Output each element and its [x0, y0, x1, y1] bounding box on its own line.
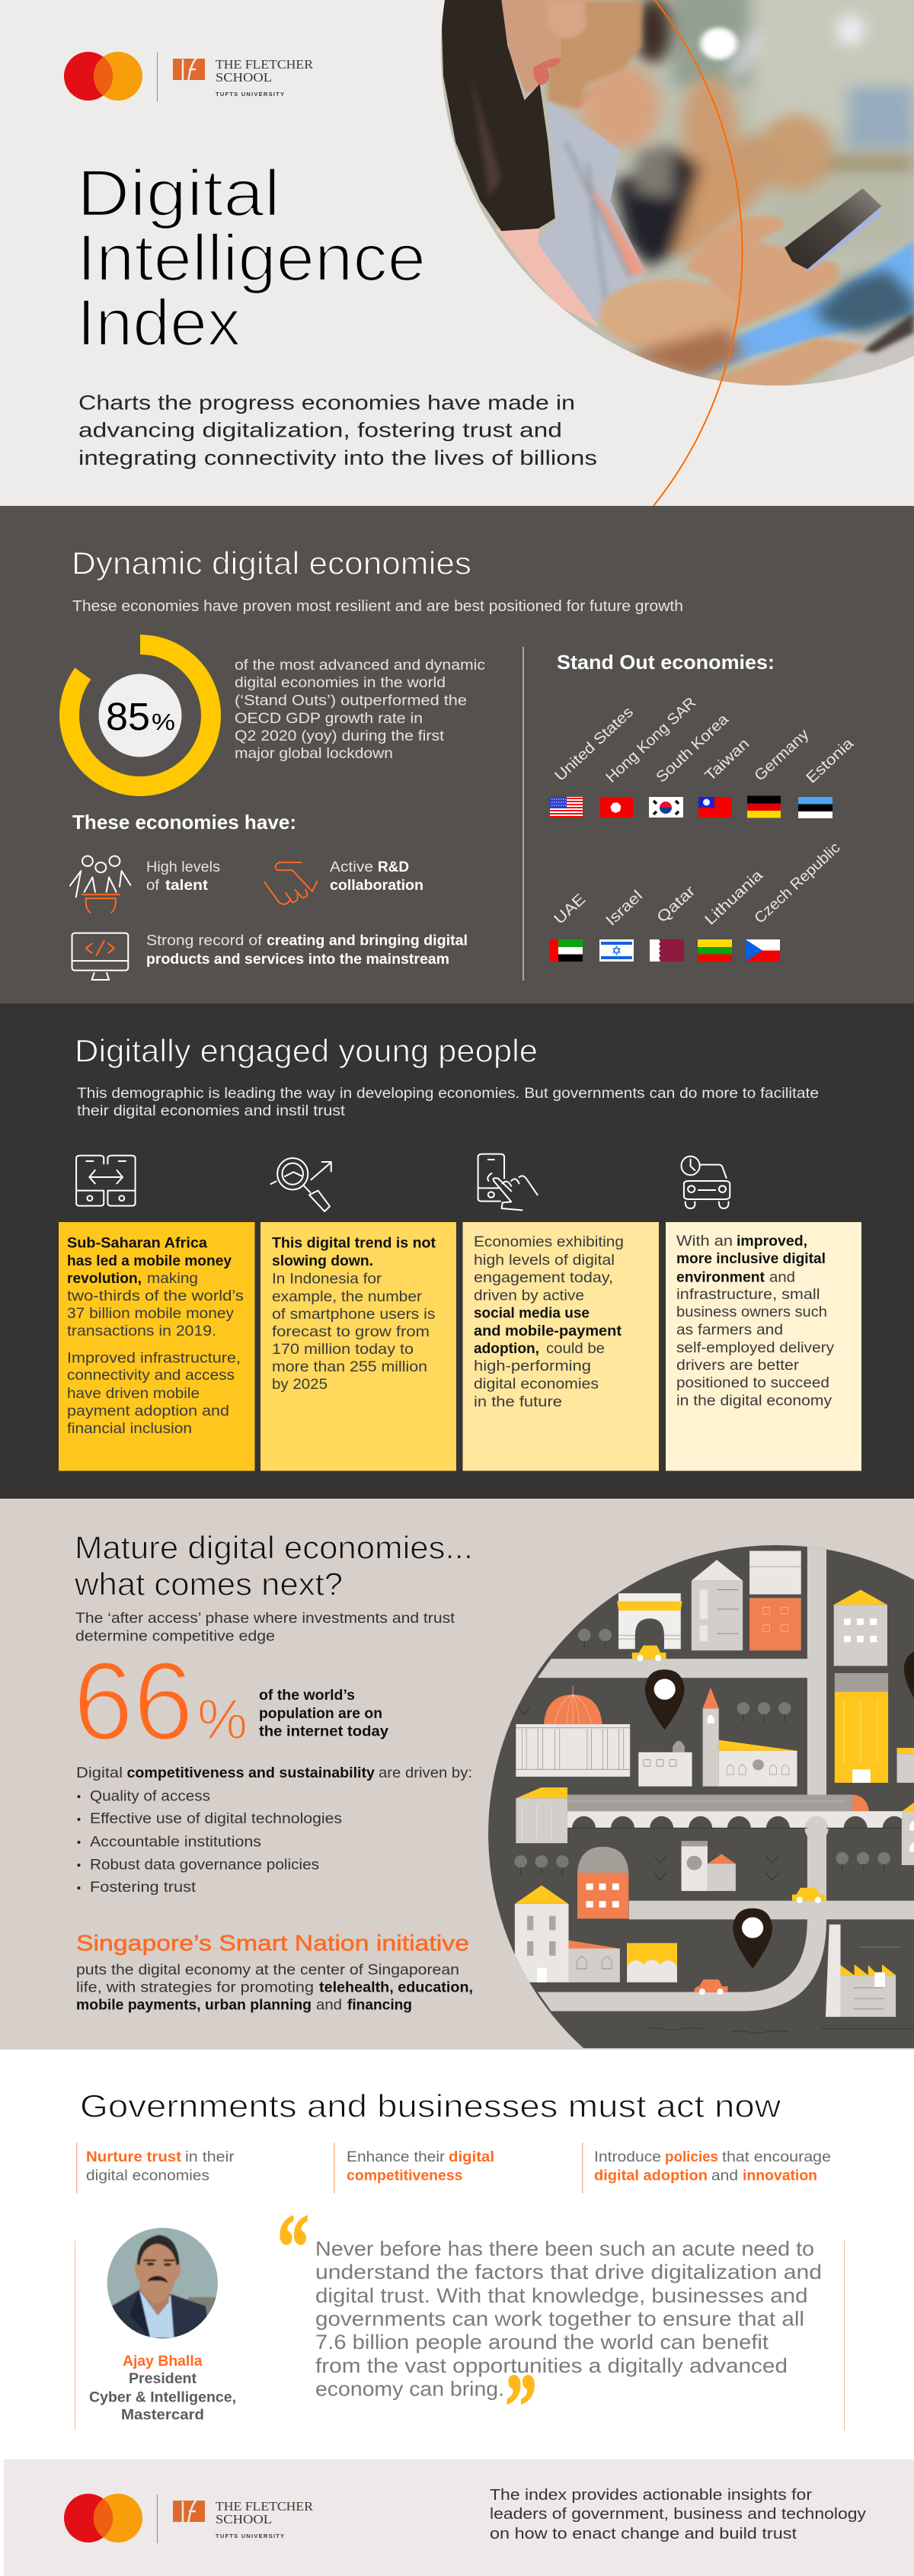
- factory: [826, 1925, 841, 2017]
- speaker name and title: President: [129, 2370, 197, 2387]
- bullet list: [78, 1787, 342, 1896]
- country labels row 1: Germany: [751, 726, 813, 785]
- card: Sub-Saharan Africa: Improved infrastructure,: [67, 1350, 241, 1367]
- heading: Governments and businesses must act now: [80, 2088, 781, 2124]
- action: digital competitiveness: [334, 2142, 494, 2194]
- card: digital trend: example, the number: [272, 1288, 423, 1305]
- card: Sub-Saharan Africa: payment adoption and: [67, 1403, 229, 1419]
- flag: Lithuania: [698, 939, 732, 962]
- country labels row 1: [551, 694, 858, 787]
- footer text: [490, 2487, 866, 2542]
- heading: what comes next?: [74, 1566, 343, 1602]
- card: digital engagement: in the future: [474, 1394, 562, 1410]
- photo: people using smartphones: [434, 0, 914, 394]
- action: policies: Introduce: [594, 2149, 661, 2165]
- card: Sub-Saharan Africa: Sub-Saharan Africa: [67, 1234, 207, 1251]
- stat description: Q2 2020 (yoy) during the first: [235, 728, 445, 744]
- card: inclusive environment: positioned to succeed: [676, 1374, 829, 1391]
- action: policies: policies: [665, 2149, 718, 2165]
- bullet list: Accountable institutions: [90, 1833, 261, 1850]
- text: digital products: products and services into the mainstream: [146, 951, 449, 968]
- card: digital engagement: engagement today,: [474, 1269, 613, 1286]
- card: digital engagement: Economies exhibiting: [474, 1234, 624, 1250]
- action: digital competitiveness: digital: [449, 2149, 494, 2165]
- action: policies: [582, 2142, 831, 2194]
- country labels row 2: Lithuania: [701, 866, 767, 929]
- text: digital products: [146, 933, 468, 968]
- card: Sub-Saharan Africa: making: [147, 1270, 198, 1287]
- card: Sub-Saharan Africa: has led a mobile money: [67, 1253, 232, 1269]
- card: inclusive environment: business owners such: [676, 1304, 827, 1320]
- title: [77, 157, 426, 360]
- country labels row 2: Israel: [602, 888, 646, 930]
- logo: Mastercard and The Fletcher School: SCHOOL: [216, 70, 272, 85]
- heading: Mature digital economies...: [75, 1530, 473, 1565]
- card: Sub-Saharan Africa: 37 billion mobile money: [67, 1305, 234, 1322]
- flag: United States: [550, 797, 583, 818]
- footer text: on how to enact change and build trust: [490, 2526, 797, 2542]
- quote text: governments can work together to ensure that all: [315, 2308, 804, 2331]
- text: drivers of competitiveness: [76, 1765, 472, 1781]
- stat description: (‘Stand Outs’) outperformed the: [235, 693, 467, 709]
- card: digital trend: of smartphone users is: [272, 1306, 436, 1323]
- action: nurture trust: digital economies: [86, 2168, 209, 2184]
- speaker name and title: Mastercard: [121, 2407, 204, 2424]
- right top buildings: [834, 1589, 887, 1605]
- card: inclusive environment: With an: [676, 1233, 733, 1250]
- action: policies: innovation: [743, 2168, 817, 2184]
- stat description: [259, 1688, 388, 1740]
- flag: Israel: [599, 939, 634, 962]
- heading: Digitally engaged young people: [75, 1033, 538, 1068]
- card: Sub-Saharan Africa: connectivity and access: [67, 1367, 235, 1384]
- card: inclusive environment: more inclusive digital: [676, 1250, 826, 1267]
- text: R&D collaboration: [330, 859, 423, 894]
- quote text: [315, 2238, 822, 2400]
- text: talent: of: [146, 877, 160, 894]
- text: Singapore: puts the digital economy at the center of Singaporean: [76, 1961, 459, 1978]
- panel: footer: [4, 2459, 914, 2576]
- location pins: [645, 1669, 685, 1730]
- action: policies: that encourage: [722, 2149, 831, 2165]
- card: inclusive environment: drivers are better: [676, 1357, 800, 1374]
- arch: [618, 1593, 681, 1649]
- top buildings: [692, 1560, 743, 1581]
- quote text: economy can bring.: [315, 2377, 504, 2400]
- card: inclusive environment: environment: [676, 1269, 765, 1285]
- phone: [785, 188, 881, 269]
- donut chart: 85 percent: [69, 645, 211, 786]
- card: digital engagement: could be: [546, 1340, 605, 1357]
- stat description: the internet today: [259, 1723, 388, 1740]
- action: nurture trust: Nurture trust: [86, 2149, 182, 2165]
- intro text: This demographic is leading the way in developing economies. But governments can do more to facilitate: [77, 1085, 819, 1102]
- text: Singapore: life, with strategies for promoting: [76, 1979, 314, 1996]
- card: inclusive environment: as farmers and: [676, 1321, 783, 1338]
- stat description: [235, 657, 485, 762]
- card: Sub-Saharan Africa: two-thirds of the world’s: [67, 1288, 244, 1304]
- icon: magnifier trend: [271, 1158, 331, 1211]
- card: digital engagement: high levels of digital: [474, 1252, 615, 1269]
- footer text: The index provides actionable insights for: [490, 2487, 812, 2504]
- flag: Germany: [747, 795, 781, 818]
- stat description: OECD GDP growth rate in: [235, 710, 423, 727]
- subheading: these economies have: These economies have:: [72, 811, 296, 834]
- text: drivers of competitiveness: Digital: [76, 1765, 123, 1781]
- action: nurture trust: [76, 2142, 235, 2194]
- country labels row 1: Hong Kong SAR: [602, 694, 699, 786]
- card: digital engagement: driven by active: [474, 1288, 584, 1304]
- card: digital trend: This digital trend is not: [272, 1234, 436, 1251]
- stat description: population are on: [259, 1706, 382, 1722]
- yellow car at junction: [792, 1888, 826, 1901]
- hands: [599, 216, 869, 391]
- stat description: major global lockdown: [235, 745, 393, 762]
- country labels row 1: South Korea: [653, 710, 733, 786]
- trees: [514, 1629, 890, 1867]
- logo: Mastercard and The Fletcher School: THE FLETCHER: [216, 57, 314, 72]
- country labels row 2: UAE: [551, 891, 589, 928]
- flag: Taiwan: [698, 797, 732, 818]
- train and viaduct: [567, 1794, 852, 1811]
- card: Sub-Saharan Africa: have driven mobile: [67, 1385, 200, 1402]
- panel: dynamic digital economies: [0, 506, 914, 1003]
- bullet list: Effective use of digital technologies: [90, 1810, 342, 1827]
- card: digital engagement: digital economies: [474, 1375, 599, 1392]
- action: policies: and: [711, 2168, 738, 2184]
- closing quotation mark: ”: [505, 2356, 537, 2458]
- country labels row 2: [551, 840, 843, 930]
- card: digital trend: slowing down.: [272, 1253, 373, 1269]
- card: digital engagement: high-performing: [474, 1358, 591, 1374]
- title: Index: [77, 286, 241, 360]
- bullet list: Robust data governance policies: [90, 1857, 319, 1874]
- icon: monitor code: [72, 933, 128, 980]
- intro text: their digital economies and instil trust: [77, 1102, 346, 1119]
- card: digital engagement: [463, 1222, 659, 1470]
- icon: hand tapping phone: [478, 1154, 538, 1210]
- text: Singapore: telehealth, education,: [319, 1979, 473, 1996]
- donut chart: 85 percent: %: [152, 709, 175, 735]
- title: Digital: [77, 157, 280, 230]
- text: R&D collaboration: Active: [330, 859, 373, 875]
- country labels row 1: Taiwan: [701, 735, 753, 785]
- small building: [673, 1741, 685, 1752]
- card: digital trend: forecast to grow from: [272, 1323, 430, 1340]
- illustration: smart city map: [472, 1529, 914, 2048]
- panel: governments and businesses must act: [75, 2094, 845, 2430]
- quote text: Never before has there been such an acute need to: [315, 2238, 814, 2261]
- woman's hair: [441, 0, 555, 231]
- heading: Dynamic digital economies: [72, 546, 471, 581]
- icon: clock and car: [682, 1157, 730, 1208]
- card: Sub-Saharan Africa: transactions in 2019.: [67, 1323, 216, 1339]
- subheading: Singapore: Singapore’s Smart Nation initiative: [76, 1931, 469, 1956]
- flag: South Korea: [649, 797, 683, 818]
- text: talent: talent: [165, 877, 209, 894]
- card: digital engagement: adoption,: [474, 1340, 539, 1357]
- stat description: of the world’s: [259, 1688, 355, 1704]
- quote text: digital trust. With that knowledge, businesses and: [315, 2284, 807, 2307]
- card: inclusive environment: self-employed delivery: [676, 1339, 834, 1356]
- icon: talent: [70, 856, 130, 913]
- icon: handshake: [264, 862, 317, 904]
- stat description: of the most advanced and dynamic: [235, 657, 485, 674]
- card: digital trend: [260, 1222, 456, 1470]
- logo: Mastercard and The Fletcher School: TUFTS UNIVERSITY: [216, 2533, 284, 2539]
- card: digital engagement: social media use: [474, 1304, 590, 1321]
- country labels row 2: Czech Republic: [751, 840, 843, 927]
- flag: Estonia: [798, 797, 833, 818]
- woman's face: [500, 0, 586, 94]
- speaker name and title: Ajay Bhalla: [123, 2353, 203, 2370]
- intro text: [75, 1610, 455, 1644]
- dome building: [544, 1694, 602, 1724]
- text: digital products: Strong record of: [146, 933, 263, 949]
- country labels row 1: United States: [551, 704, 637, 785]
- logo: Mastercard and The Fletcher School: THE FLETCHER: [216, 2499, 314, 2514]
- subtitle: [78, 392, 597, 469]
- roads: [538, 1529, 914, 2011]
- card: digital trend: In Indonesia for: [272, 1271, 382, 1288]
- action: digital competitiveness: competitiveness: [347, 2168, 463, 2184]
- intro text: The ‘after access’ phase where investments and trust: [75, 1610, 455, 1627]
- quote text: from the vast opportunities a digitally advanced: [315, 2354, 788, 2377]
- subtitle: advancing digitalization, fostering trust and: [78, 419, 562, 442]
- card: inclusive environment: improved,: [737, 1233, 807, 1250]
- heading: [74, 1530, 473, 1602]
- intro text: [77, 1085, 819, 1119]
- card: inclusive environment: in the digital economy: [676, 1393, 832, 1410]
- text: drivers of competitiveness: are driven by:: [379, 1765, 472, 1781]
- flag: Hong Kong: [600, 797, 633, 818]
- card: Sub-Saharan Africa: revolution,: [67, 1270, 142, 1287]
- logo: Mastercard and The Fletcher School: [64, 2494, 314, 2543]
- logo: Mastercard and The Fletcher School: TUFTS UNIVERSITY: [216, 91, 284, 98]
- bullet list: Quality of access: [90, 1787, 210, 1804]
- text: R&D collaboration: R&D: [378, 859, 409, 875]
- stat: 66 percent: %: [197, 1688, 248, 1751]
- card: digital trend: 170 million today to: [272, 1341, 414, 1358]
- logo: Mastercard and The Fletcher School: SCHOOL: [216, 2512, 272, 2526]
- intro text: determine competitive edge: [75, 1627, 275, 1644]
- text: Singapore: mobile payments, urban planning: [76, 1997, 312, 2014]
- subheading: stand out economies: Stand Out economies:: [557, 651, 775, 674]
- opening quotation mark: “: [277, 2197, 309, 2299]
- donut chart: 85 percent: 85: [106, 695, 150, 738]
- card: digital trend: more than 255 million: [272, 1358, 427, 1375]
- church: [703, 1708, 719, 1787]
- card: Sub-Saharan Africa: financial inclusion: [67, 1420, 192, 1437]
- speaker name and title: Cyber & Intelligence,: [89, 2389, 236, 2406]
- text: drivers of competitiveness: competitiveness and sustainability: [126, 1765, 375, 1781]
- action: digital competitiveness: Enhance their: [347, 2149, 446, 2165]
- card: Sub-Saharan Africa: [59, 1222, 254, 1470]
- woman's shirt: [495, 223, 599, 328]
- card: inclusive environment: infrastructure, small: [676, 1286, 820, 1303]
- orange car: [694, 1979, 728, 1992]
- logo: Mastercard and The Fletcher School: [64, 52, 314, 101]
- bullet list: Fostering trust: [90, 1879, 197, 1896]
- text: R&D collaboration: collaboration: [330, 877, 423, 894]
- quote text: understand the factors that drive digitalization and: [315, 2261, 822, 2283]
- portrait: Ajay Bhalla: [107, 2228, 218, 2339]
- subtitle: Charts the progress economies have made in: [78, 392, 575, 414]
- yellow car on top road: [632, 1646, 666, 1659]
- text: talent: High levels: [146, 859, 220, 875]
- card: digital engagement: and mobile-payment: [474, 1323, 622, 1339]
- speaker name and title: [89, 2353, 236, 2424]
- text: Singapore: financing: [347, 1997, 412, 2014]
- panel: mature digital economies: [0, 1499, 914, 2050]
- arc: orange curve: [654, 0, 743, 506]
- flag: Qatar: [650, 939, 684, 962]
- card: digital trend: by 2025: [272, 1376, 328, 1393]
- flag: UAE: [550, 939, 583, 962]
- text: Singapore: and: [316, 1997, 342, 2014]
- action: nurture trust: in their: [185, 2149, 235, 2165]
- panel: digitally engaged young people: [0, 1003, 914, 1499]
- stat description: digital economies in the world: [235, 674, 446, 691]
- country labels row 1: Estonia: [803, 734, 858, 787]
- stat: 66 percent: 66: [73, 1639, 193, 1763]
- text: digital products: creating and bringing digital: [267, 933, 468, 949]
- country labels row 2: Qatar: [654, 882, 699, 926]
- action: policies: digital adoption: [594, 2168, 708, 2184]
- intro text: These economies have proven most resilient and are best positioned for future growth: [72, 598, 683, 615]
- quote text: 7.6 billion people around the world can benefit: [315, 2331, 769, 2354]
- subtitle: integrating connectivity into the lives of billions: [78, 446, 597, 469]
- text: Singapore: [76, 1961, 473, 2014]
- card: inclusive environment: [666, 1222, 861, 1470]
- flag: Czech Republic: [746, 939, 780, 962]
- text: talent: [146, 859, 220, 894]
- panel: hero: [0, 0, 914, 506]
- lower buildings: [577, 1847, 628, 1873]
- title: Intelligence: [77, 222, 426, 295]
- footer text: leaders of government, business and technology: [490, 2506, 866, 2523]
- card: inclusive environment: and: [769, 1269, 795, 1285]
- icon: mobile money phones: [76, 1156, 136, 1206]
